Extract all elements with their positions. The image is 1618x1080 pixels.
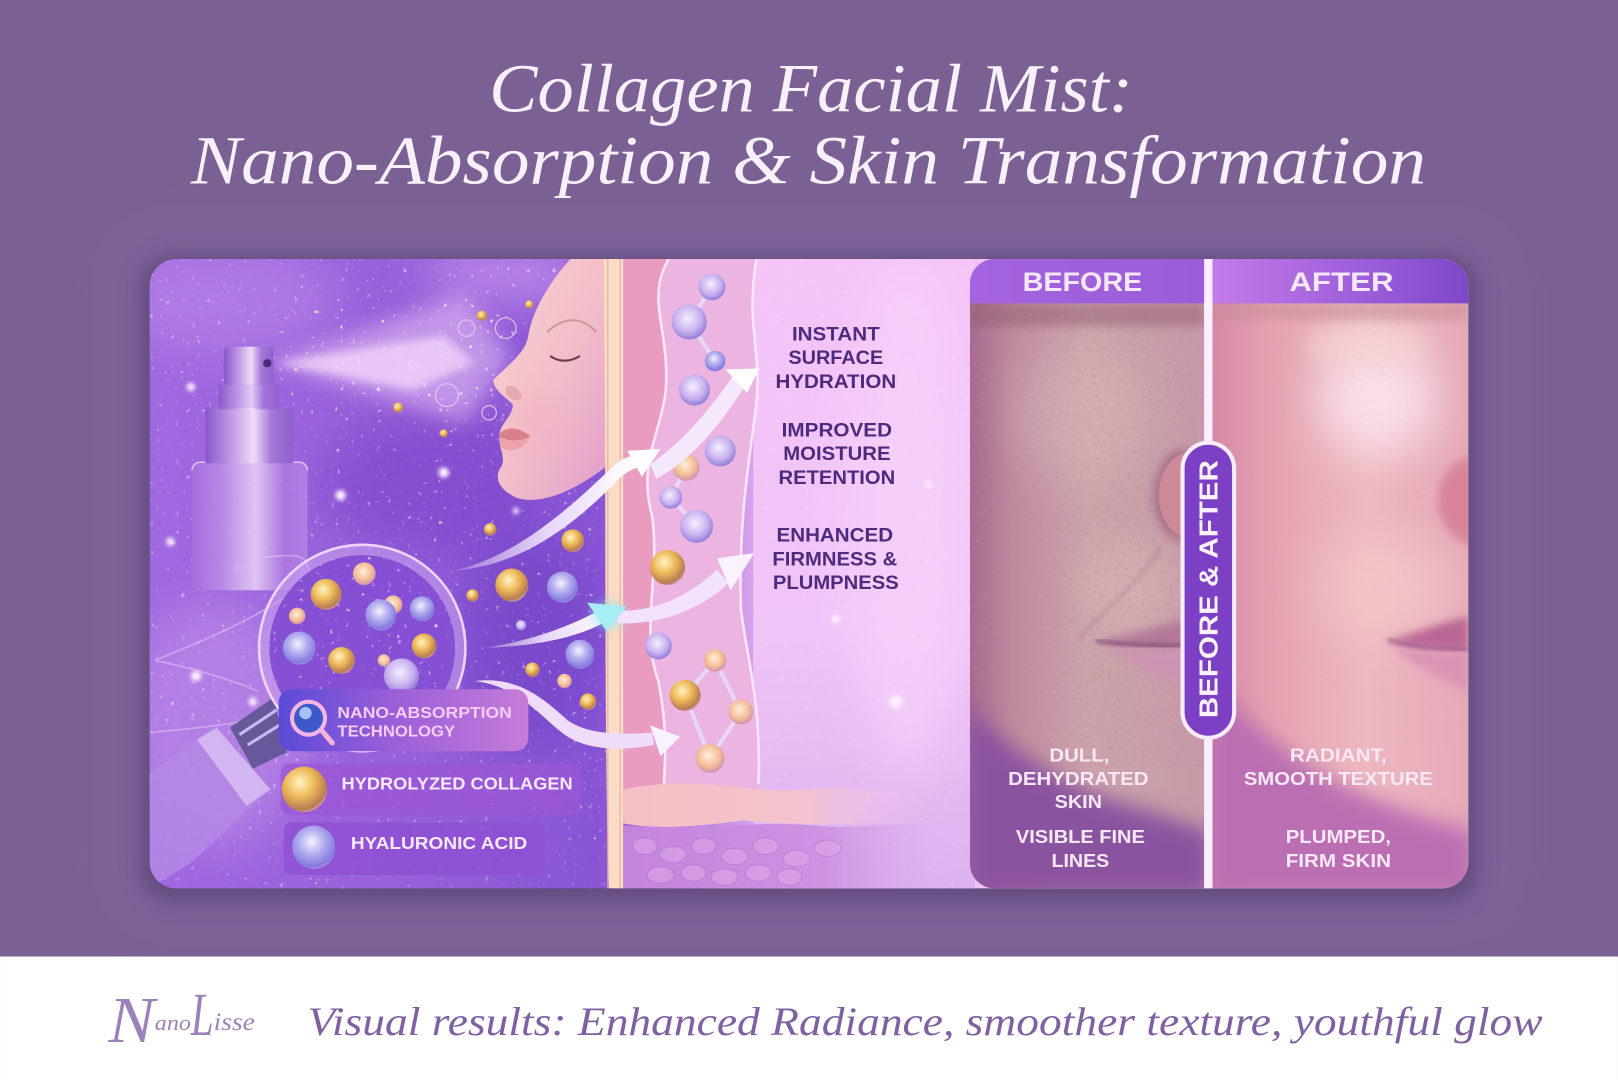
molecules in skin xyxy=(645,273,753,773)
icon: magnifier xyxy=(292,702,332,743)
floating particles xyxy=(466,523,596,710)
logo: NanoLisse: L xyxy=(190,981,214,1049)
mist spray xyxy=(271,294,533,438)
logo: NanoLisse: isse xyxy=(214,1007,255,1036)
benefit: firmness xyxy=(772,526,899,594)
before header: BEFORE xyxy=(1023,267,1142,297)
nose xyxy=(1154,450,1219,541)
panel halo xyxy=(88,201,1532,949)
title xyxy=(190,49,1426,199)
benefit: moisture retention: IMPROVED xyxy=(782,420,892,441)
before captions: DEHYDRATED xyxy=(1008,768,1148,789)
benefit: surface hydration: HYDRATION xyxy=(775,372,896,393)
before captions: VISIBLE FINE xyxy=(1016,826,1145,847)
divider xyxy=(1204,259,1212,888)
badge: hydrolyzed collagen xyxy=(281,764,581,815)
benefit: surface hydration xyxy=(775,325,896,393)
badge: hyaluronic acid: HYALURONIC ACID xyxy=(351,833,527,853)
after header: AFTER xyxy=(1289,267,1394,297)
benefit: moisture retention: RETENTION xyxy=(779,468,895,489)
before and after pill: BEFORE & AFTER xyxy=(1196,460,1224,718)
badge: hydrolyzed collagen: HYDROLYZED COLLAGEN xyxy=(342,773,573,793)
spray bottle xyxy=(192,347,308,590)
nose xyxy=(1438,457,1509,544)
sparkle field xyxy=(150,259,970,888)
arrow: surface hydration xyxy=(454,368,759,571)
face profile xyxy=(493,259,609,500)
badge: nano-absorption technology xyxy=(279,689,528,751)
arrow: firmness xyxy=(475,680,680,756)
wave lines xyxy=(150,556,310,733)
badge: nano-absorption technology: NANO-ABSORPTION xyxy=(337,705,512,722)
panel: main illustration xyxy=(114,242,1509,898)
jaw shadow xyxy=(1207,671,1476,898)
magnifier xyxy=(150,545,465,888)
panel: after photo xyxy=(1207,259,1509,898)
benefit: firmness: FIRMNESS & xyxy=(772,549,897,570)
benefit: moisture retention: MOISTURE xyxy=(783,444,891,465)
title: Collagen Facial Mist: xyxy=(489,49,1133,126)
badge: hyaluronic acid xyxy=(284,822,545,875)
benefit: surface hydration: INSTANT xyxy=(792,325,880,346)
lips xyxy=(1096,617,1204,689)
icon: gold sphere xyxy=(282,767,327,812)
benefit: surface hydration: SURFACE xyxy=(788,348,883,369)
logo: NanoLisse: N xyxy=(107,984,159,1057)
after captions: RADIANT, xyxy=(1290,745,1387,766)
benefit: firmness: ENHANCED xyxy=(776,526,893,547)
skin cross-section xyxy=(604,259,911,888)
after captions xyxy=(1244,745,1433,871)
after captions: PLUMPED, xyxy=(1286,826,1391,847)
after captions: SMOOTH TEXTURE xyxy=(1244,768,1433,789)
benefit: moisture retention xyxy=(779,420,895,489)
before captions: DULL, xyxy=(1049,745,1109,766)
icon: blue sphere xyxy=(292,825,335,869)
title: Nano-Absorption & Skin Transformation xyxy=(190,122,1426,199)
arrow: moisture retention xyxy=(485,553,754,648)
footer band xyxy=(0,957,1618,1080)
before captions xyxy=(1008,745,1148,871)
footer tagline: Visual results: Enhanced Radiance, smoother texture, youthful glow xyxy=(308,999,1543,1044)
panel: before photo xyxy=(965,259,1219,898)
jaw shadow xyxy=(965,702,1212,898)
before and after pill xyxy=(1183,443,1234,738)
benefit: firmness: PLUMPNESS xyxy=(773,573,899,594)
after header xyxy=(1212,259,1468,303)
badge: nano-absorption technology: TECHNOLOGY xyxy=(337,724,455,741)
before captions: LINES xyxy=(1051,850,1109,871)
logo: NanoLisse: ano xyxy=(155,1011,191,1035)
after captions: FIRM SKIN xyxy=(1286,850,1391,871)
before header xyxy=(970,259,1204,303)
before captions: SKIN xyxy=(1055,791,1102,812)
panel shadow xyxy=(139,255,1479,903)
lips xyxy=(1388,617,1468,691)
logo: NanoLisse xyxy=(107,981,255,1057)
